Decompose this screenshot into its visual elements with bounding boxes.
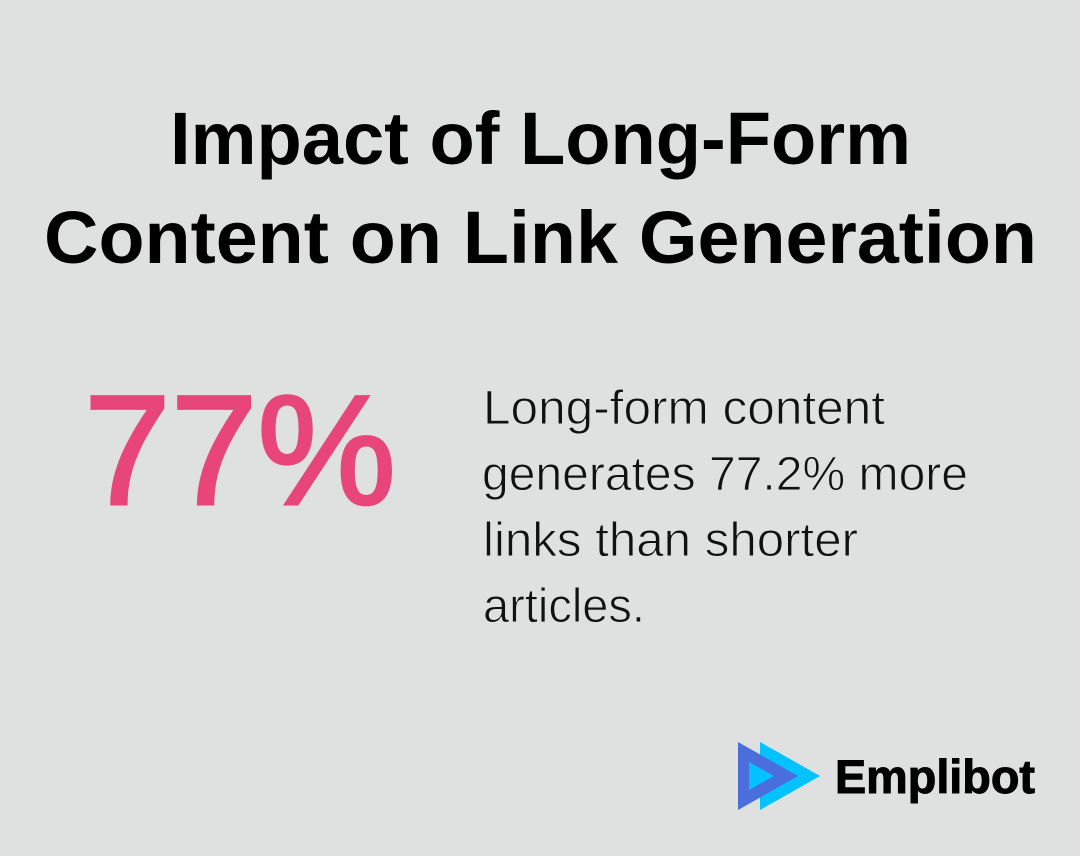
description text: links than shorter xyxy=(483,514,858,567)
title: Impact of Long-Form xyxy=(170,97,911,180)
title: Content on Link Generation xyxy=(44,196,1037,279)
logo wordmark: Emplibot xyxy=(835,750,1035,803)
description text: Long-form content xyxy=(483,382,885,435)
logo: Emplibot xyxy=(738,742,1035,810)
icon: play triangles xyxy=(738,742,820,810)
title xyxy=(44,97,1037,279)
big stat: 77%: 77% xyxy=(84,364,396,538)
description text: generates 77.2% more xyxy=(482,448,968,501)
description text xyxy=(482,382,968,633)
description text: articles. xyxy=(483,580,645,633)
